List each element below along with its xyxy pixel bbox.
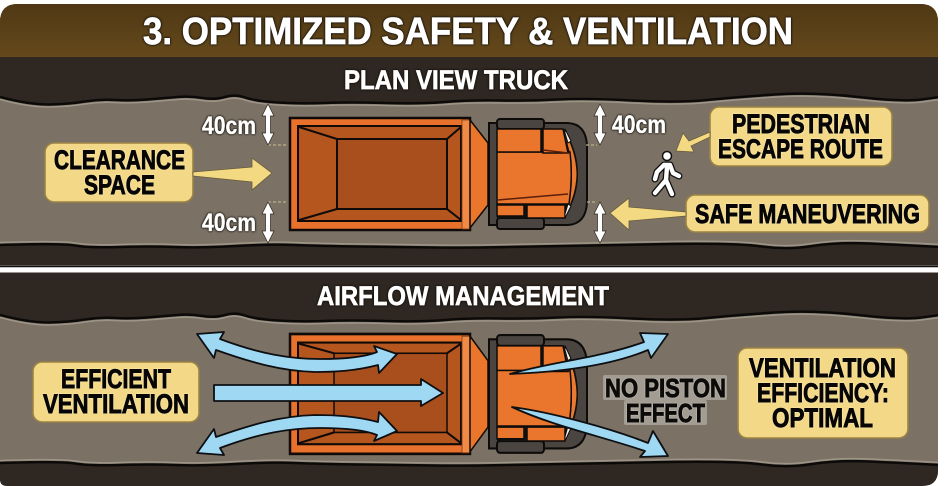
- truck: plan view: [290, 118, 587, 230]
- arrow: airflow upper curve: [197, 332, 397, 373]
- callout: ventilation efficiency optimal: [738, 348, 908, 438]
- arrow: bottom left gap: [262, 202, 274, 243]
- arrow: top left gap: [262, 104, 274, 145]
- clearance guide lines: [268, 145, 597, 202]
- label: 40cm top left: 40cm: [202, 112, 256, 140]
- callout: ventilation efficiency optimal: VENTILATION: [749, 353, 896, 383]
- callout: pedestrian escape route: [710, 107, 892, 166]
- callout: efficient ventilation: VENTILATION: [43, 389, 189, 419]
- label: 40cm bottom left: 40cm: [202, 209, 256, 237]
- heading: airflow management: AIRFLOW MANAGEMENT: [317, 281, 609, 311]
- callout: clearance space: [45, 143, 193, 202]
- callout: no piston effect: EFFECT: [626, 398, 705, 428]
- road surface: [0, 302, 940, 485]
- arrow: airflow lower curve: [197, 412, 397, 455]
- callout: ventilation efficiency optimal: EFFICIENCY:: [757, 378, 889, 408]
- arrow: clearance: [193, 158, 272, 190]
- callout: efficient ventilation: EFFICIENT: [61, 364, 171, 394]
- callout: ventilation efficiency optimal: OPTIMAL: [772, 403, 873, 433]
- heading: plan view truck: PLAN VIEW TRUCK: [344, 65, 568, 95]
- arrow: safe maneuvering: [610, 198, 686, 230]
- road surface: [0, 92, 938, 250]
- panel: airflow management: [0, 272, 940, 486]
- arrow: airflow front upper: [510, 333, 668, 374]
- callout: clearance space: SPACE: [84, 170, 155, 200]
- callout: efficient ventilation: [33, 362, 199, 422]
- callout: pedestrian escape route: ESCAPE ROUTE: [718, 134, 883, 164]
- icon: pedestrian: [655, 152, 679, 194]
- callout: no piston effect: [603, 373, 727, 428]
- arrow: top right gap: [594, 104, 606, 145]
- arrow: bottom right gap: [594, 202, 606, 243]
- divider: [0, 266, 938, 268]
- arrow: airflow center: [214, 379, 443, 406]
- truck: airflow view: [290, 334, 587, 454]
- label: 40cm top right: 40cm: [612, 111, 666, 139]
- panel: plan view truck: [0, 4, 940, 267]
- arrow: airflow front lower: [512, 407, 668, 457]
- callout: no piston effect: NO PISTON: [605, 373, 726, 403]
- arrow: to pedestrian: [676, 132, 710, 152]
- title band: [0, 4, 938, 57]
- callout: pedestrian escape route: PEDESTRIAN: [732, 109, 870, 139]
- callout: clearance space: CLEARANCE: [54, 145, 185, 175]
- title: 3. OPTIMIZED SAFETY & VENTILATION: [143, 11, 793, 53]
